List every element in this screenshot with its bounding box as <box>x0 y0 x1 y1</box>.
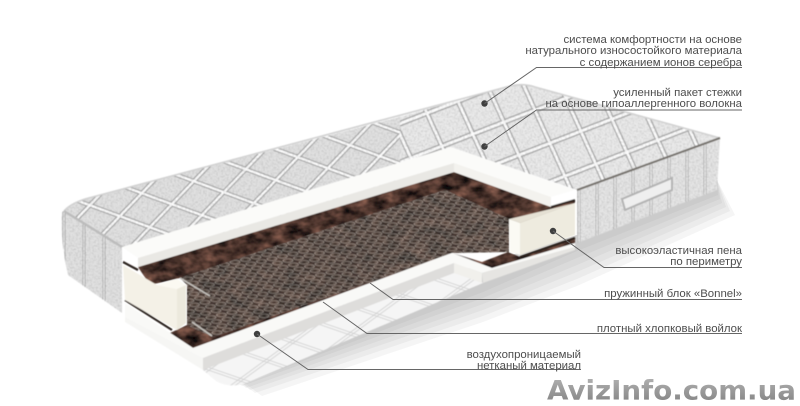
watermark: AvizInfo.com.ua <box>547 376 796 406</box>
callout: comfort system: система комфортности на основе <box>563 34 742 46</box>
mattress <box>60 80 722 385</box>
callout: nonwoven: воздухопроницаемый <box>467 349 581 361</box>
callout: comfort system: натурального износостойкого материала <box>525 45 743 57</box>
left piping <box>64 211 122 247</box>
inner faces <box>138 163 454 267</box>
mattress top quilted surface right <box>400 85 720 190</box>
lower front quilted cover <box>203 262 483 385</box>
callout: spring block <box>370 283 742 300</box>
front face <box>203 263 454 370</box>
spring wires <box>180 278 212 336</box>
top face <box>122 147 575 258</box>
felt dark edge lines <box>123 200 575 330</box>
right piping <box>577 138 720 190</box>
callout: foam: по периметру <box>670 256 742 268</box>
spring block <box>180 185 515 340</box>
callout: nonwoven: нетканый материал <box>477 360 581 372</box>
callout: stitching: усиленный пакет стежки <box>613 87 742 99</box>
callout: nonwoven <box>254 331 581 372</box>
callout: foam: высокоэластичная пена <box>615 245 743 257</box>
callout: cotton felt <box>323 302 743 335</box>
mattress top quilted surface left <box>64 117 400 247</box>
right foam block <box>509 203 575 255</box>
callout: spring block: пружинный блок «Bonnel» <box>604 288 742 300</box>
felt patches on spring <box>180 185 515 340</box>
fabric texture <box>60 80 722 320</box>
bottom white foam layer <box>125 243 575 370</box>
mattress right side <box>577 138 720 243</box>
top face <box>125 243 575 358</box>
end face <box>454 263 482 283</box>
brown felt layers <box>130 165 580 355</box>
callout: stitching: на основе гипоаллергенного волокна <box>546 98 743 110</box>
handle <box>622 178 672 210</box>
callout: stitching <box>481 87 743 150</box>
mattress top piping <box>64 85 720 211</box>
callout: cotton felt: плотный хлопковый войлок <box>597 323 743 335</box>
mattress left end side <box>62 207 122 313</box>
callout: comfort system: с содержанием ионов серебра <box>580 57 743 69</box>
left foam block <box>123 265 186 330</box>
callout: foam <box>550 228 743 268</box>
floor shadow <box>200 180 735 396</box>
top white foam layer <box>122 147 575 267</box>
callout: comfort system <box>481 34 743 107</box>
